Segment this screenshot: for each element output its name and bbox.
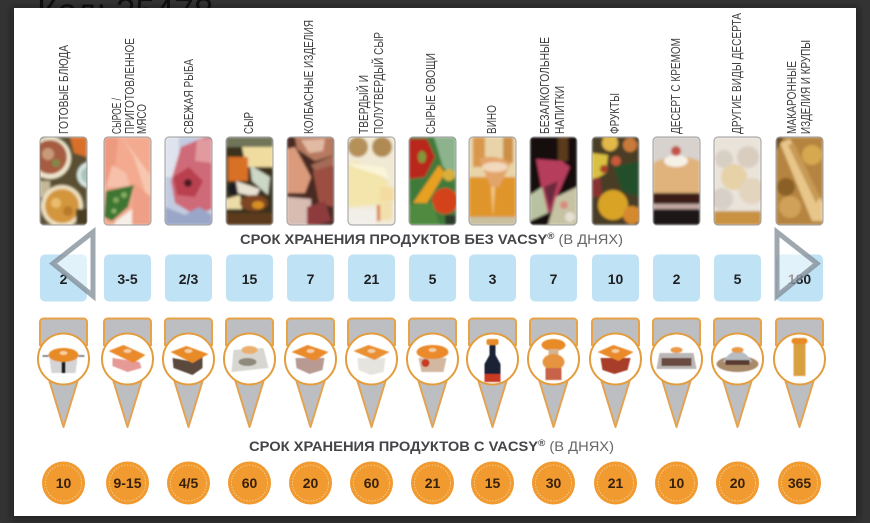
marker 1: pot	[38, 318, 89, 427]
blue box 13: 180	[788, 271, 811, 287]
label: pasta and grains	[785, 40, 813, 134]
orange badge 1: 10	[56, 475, 71, 491]
photo: fresh fish	[165, 137, 212, 225]
blue box 1	[40, 254, 87, 302]
food photos row	[29, 135, 823, 227]
heading: storage with VACSY: (В ДНЯХ)	[545, 439, 614, 454]
vertical category labels	[57, 12, 813, 134]
heading: storage with VACSY: ®	[538, 438, 546, 448]
label: fresh fish: СВЕЖАЯ РЫБА	[182, 58, 196, 134]
heading: storage with VACSY: СРОК ХРАНЕНИЯ ПРОДУКТОВ С VACSY	[249, 439, 538, 454]
marker 2: rectangular container with meat	[102, 318, 153, 427]
blue box 9	[530, 254, 577, 302]
orange badge 11: 10	[669, 475, 684, 491]
marker 13: tall pasta tube	[774, 318, 825, 427]
photo: ready meals	[40, 137, 87, 225]
blue box 10: 10	[608, 271, 623, 287]
photo: pasta and grains	[776, 137, 823, 225]
orange badge 2	[106, 462, 149, 504]
label: raw or cooked meat: СЫРОЕ /	[110, 98, 124, 134]
heading: storage without VACSY: ®	[547, 231, 555, 241]
label: cream dessert: ДЕСЕРТ С КРЕМОМ	[669, 38, 683, 134]
orange badge 5	[289, 462, 332, 504]
blue box 9: 7	[550, 271, 558, 287]
photo: raw vegetables	[409, 137, 458, 225]
blue box 5: 7	[307, 271, 315, 287]
label: hard cheese: ПОЛУТВЕРДЫЙ СЫР	[371, 32, 386, 134]
label: wine: ВИНО	[485, 105, 499, 134]
blue box 7	[409, 254, 456, 302]
orange badge 6	[350, 462, 393, 504]
blue box 4: 15	[242, 271, 257, 287]
blue days row	[40, 254, 823, 302]
orange badge 4	[228, 462, 271, 504]
orange days row	[42, 462, 821, 504]
blue box 6: 21	[364, 271, 379, 287]
orange badge 4: 60	[242, 475, 257, 491]
label: pasta and grains: ИЗДЕЛИЯ И КРУПЫ	[799, 40, 813, 134]
blue box 6	[348, 254, 395, 302]
photo: fruits	[592, 135, 641, 225]
photo frames	[40, 137, 823, 225]
marker 3: square container	[163, 318, 214, 427]
orange badge 9: 30	[546, 475, 561, 491]
orange badge 1	[42, 462, 85, 504]
marker 7: round container with vegetables	[407, 318, 458, 427]
blue box 3: 2/3	[179, 271, 198, 287]
label: raw or cooked meat: МЯСО	[135, 104, 149, 134]
heading: storage without VACSY: СРОК ХРАНЕНИЯ ПРОДУКТОВ БЕЗ VACSY	[240, 232, 547, 247]
blue box 11	[653, 254, 700, 302]
arrow: next	[777, 232, 817, 296]
marker 11: pastry tray	[651, 318, 702, 427]
label: ready meals: ГОТОВЫЕ БЛЮДА	[57, 44, 71, 134]
orange badge 10	[594, 462, 637, 504]
photo: hard cheese	[348, 137, 395, 225]
orange badge 8	[471, 462, 514, 504]
marker 10: container with tomatoes	[590, 318, 641, 427]
blue box 1: 2	[60, 271, 68, 287]
label: soft drinks	[538, 37, 567, 134]
marker 9: stacked jar	[528, 318, 579, 427]
photo: other desserts	[714, 138, 761, 225]
blue box 12: 5	[734, 271, 742, 287]
arrow: previous	[53, 232, 93, 296]
blue box 2	[104, 254, 151, 302]
orange badge 2: 9-15	[113, 475, 142, 491]
label: raw or cooked meat: ПРИГОТОВЛЕННОЕ	[123, 38, 137, 134]
orange badge 13	[778, 462, 821, 504]
marker 12: round dessert dome	[712, 318, 763, 427]
label: hard cheese: ТВЕРДЫЙ И	[356, 75, 371, 134]
label: pasta and grains: МАКАРОННЫЕ	[785, 61, 799, 134]
blue box 7: 5	[429, 271, 437, 287]
label: raw or cooked meat	[110, 38, 149, 134]
label: fruits: ФРУКТЫ	[608, 93, 622, 134]
orange badge 12	[716, 462, 759, 504]
blue box 5	[287, 254, 334, 302]
marker 4: tray with cheese	[224, 318, 275, 427]
blue box 13	[776, 254, 823, 302]
blue box 8: 3	[489, 271, 497, 287]
label: cheese: СЫР	[242, 112, 256, 134]
heading: storage without VACSY: (В ДНЯХ)	[554, 232, 623, 247]
photo: sausages	[287, 137, 334, 225]
orange badge 5: 20	[303, 475, 318, 491]
orange badge 6: 60	[364, 475, 379, 491]
photo: cheese	[226, 137, 273, 225]
marker 5: container with sausages	[285, 318, 336, 427]
orange badge 9	[532, 462, 575, 504]
photo: cream dessert	[653, 137, 700, 225]
container markers row	[38, 318, 825, 427]
blue box 8	[469, 254, 516, 302]
blue box 4	[226, 254, 273, 302]
orange badge 3	[167, 462, 210, 504]
blue box 2: 3-5	[117, 271, 138, 287]
orange badge 11	[655, 462, 698, 504]
label: raw vegetables: СЫРЫЕ ОВОЩИ	[424, 53, 438, 134]
label: hard cheese	[356, 32, 386, 134]
blue box 12	[714, 254, 761, 302]
orange badge 8: 15	[485, 475, 500, 491]
label: soft drinks: БЕЗАЛКОГОЛЬНЫЕ	[538, 37, 552, 134]
photo: raw meat	[104, 137, 151, 225]
orange badge 12: 20	[730, 475, 745, 491]
orange badge 7: 21	[425, 475, 440, 491]
orange badge 7	[411, 462, 454, 504]
marker 6: container with cheese	[346, 318, 397, 427]
photo: wine	[469, 137, 516, 225]
orange badge 13: 365	[788, 475, 811, 491]
blue box 3	[165, 254, 212, 302]
orange badge 10: 21	[608, 475, 623, 491]
label: soft drinks: НАПИТКИ	[553, 86, 567, 134]
photo: soft drinks	[530, 137, 577, 225]
blue box 10	[592, 254, 639, 302]
marker 8: sauce bottle	[467, 318, 518, 427]
blue box 11: 2	[673, 271, 681, 287]
orange badge 3: 4/5	[179, 475, 198, 491]
